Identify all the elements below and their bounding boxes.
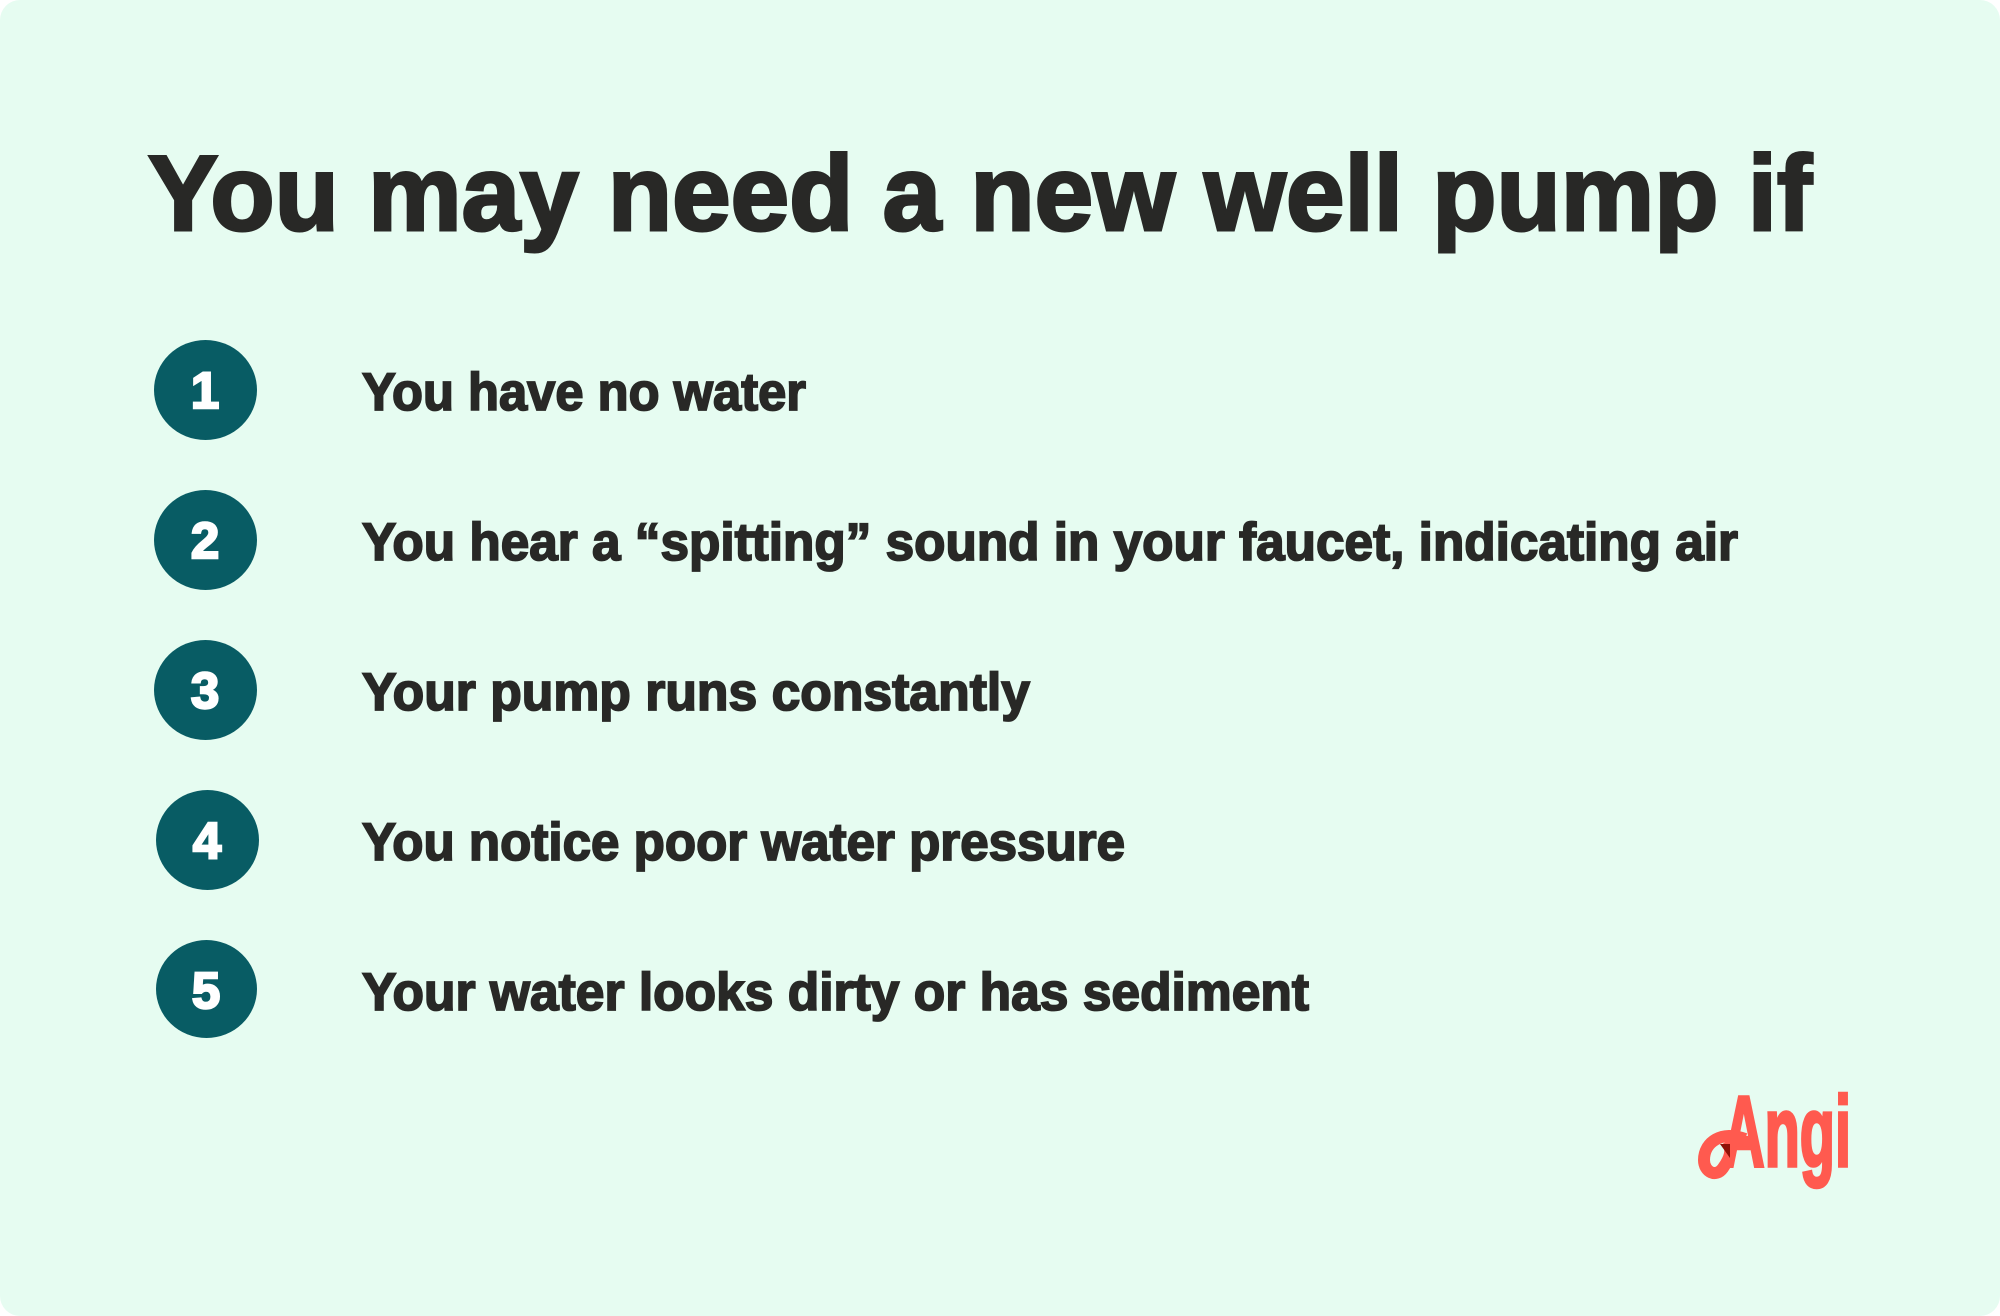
list item 4 [156, 790, 1125, 890]
list item 2: You hear a “spitting” sound in your faucet, indicating air [362, 513, 1738, 572]
list item 1 [154, 340, 806, 440]
list item 1: You have no water [362, 363, 806, 422]
list item 5: Your water looks dirty or has sediment [362, 963, 1309, 1022]
list item 1: 1 [191, 362, 219, 419]
list item 2: 2 [191, 512, 219, 569]
list item 3: 3 [191, 662, 219, 719]
logo: Angi: Angi [1723, 1076, 1851, 1188]
list item 5: 5 [192, 962, 220, 1019]
logo: Angi [1704, 1076, 1851, 1188]
list item 4: You notice poor water pressure [362, 813, 1125, 872]
title: You may need a new well pump if [148, 133, 1812, 253]
list item 5 [156, 940, 1309, 1038]
list item 4: 4 [193, 812, 222, 869]
list item 2 [154, 490, 1738, 590]
list item 3: Your pump runs constantly [362, 663, 1031, 722]
list item 3 [154, 640, 1031, 740]
